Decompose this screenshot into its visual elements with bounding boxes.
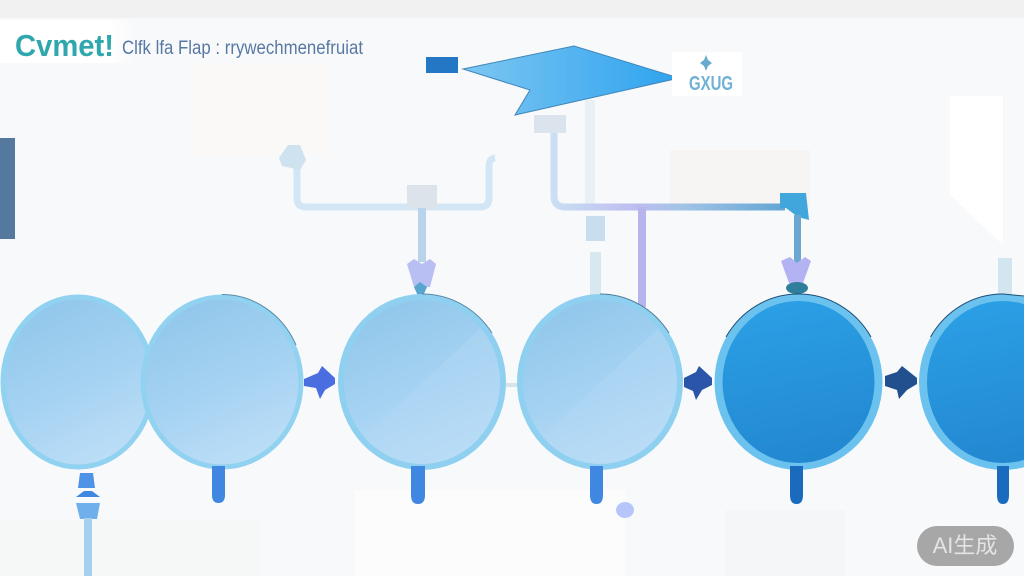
lens 4 glass: [523, 300, 677, 464]
left pipe tip: [414, 282, 427, 296]
AI badge: [917, 526, 1014, 566]
right tip: [786, 282, 808, 294]
right pipe network: [534, 100, 1012, 307]
purple dot: [616, 502, 634, 518]
lens 3 top arc: [422, 294, 492, 333]
badge label: GXUG: [689, 73, 733, 95]
title: [0, 20, 136, 63]
lens 3 highlight: [477, 328, 482, 332]
pale drop to lens 4: [590, 252, 601, 296]
lens 5: [714, 294, 882, 504]
left side tab: [0, 138, 15, 239]
lens 2: [143, 294, 301, 503]
lens 4 stem: [590, 466, 603, 504]
lens 6 glass: [927, 301, 1024, 463]
left pipe network: [279, 145, 495, 296]
lens 4 top arc: [600, 294, 669, 333]
arrow 5 to 6: [885, 366, 917, 399]
lens 3 glass: [344, 300, 500, 464]
lens 6 top arc: [930, 294, 1024, 337]
lens 4 highlight: [655, 329, 660, 332]
elbow: [780, 193, 809, 220]
lens 5 top arc: [726, 294, 871, 337]
arrow 4 to 5: [684, 366, 712, 400]
left pipe drop: [418, 208, 426, 262]
arrow 2 to 3: [304, 366, 335, 399]
subtitle: Clfk lfa Flap : rrywechmenefruiat: [122, 38, 364, 59]
badge star: [700, 55, 712, 71]
left pipe nozzle: [407, 259, 436, 287]
lens 3: [338, 294, 506, 504]
banner arrow: [463, 46, 679, 115]
link 3 to 4: [505, 383, 519, 387]
right nozzle: [781, 257, 811, 283]
left pipe connector: [407, 185, 437, 209]
far right pale pipe: [998, 258, 1012, 296]
left pipe cap: [279, 145, 306, 170]
lens 6 stem: [997, 466, 1009, 504]
lens 6: [919, 294, 1024, 504]
lens 1 stem: [76, 473, 100, 576]
lens 5 glass: [722, 301, 874, 463]
badge: [672, 52, 742, 96]
pipe top connector: [534, 115, 566, 133]
title word: Cvmet!: [15, 28, 114, 63]
small connector block: [586, 216, 605, 241]
lens 2 stem: [212, 466, 225, 503]
AI badge label: AI生成: [933, 533, 997, 558]
lens 5 stem: [790, 466, 803, 504]
purple branch: [638, 207, 646, 307]
lens 3 stem: [411, 466, 425, 504]
small blue flag: [426, 57, 458, 73]
right drop: [794, 215, 801, 263]
pale vertical pipe: [585, 100, 595, 205]
lens 4: [517, 294, 683, 504]
lens 1: [3, 297, 153, 576]
lens 2 top arc: [222, 294, 296, 345]
